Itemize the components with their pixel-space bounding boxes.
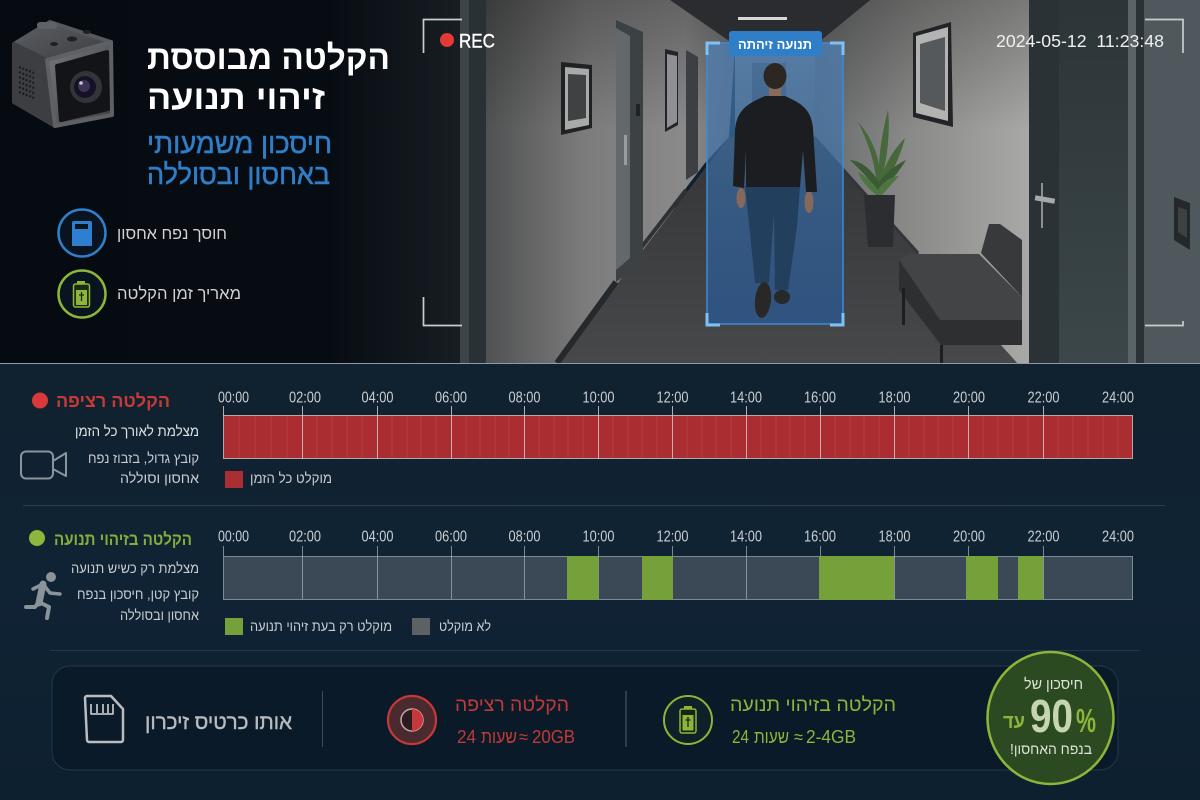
legend: not recorded <box>412 618 491 635</box>
benefit: extends recording time <box>58 270 241 318</box>
motion detected tag: תנועה זיהתה <box>738 37 812 52</box>
badge: up to 90% savings <box>988 652 1114 784</box>
icon: running person <box>26 572 60 618</box>
time axis: motion: 14:00 <box>730 528 762 546</box>
time axis: continuous: 14:00 <box>730 390 762 406</box>
section: continuous recording <box>21 390 1134 488</box>
description: continuous recording <box>75 423 199 486</box>
badge: up to 90% savings: חיסכון של <box>1024 676 1083 693</box>
time axis: continuous: 12:00 <box>656 390 689 406</box>
badge: up to 90% savings: 90 <box>1030 690 1073 742</box>
timestamp: 2024-05-12 11:23:48 <box>996 31 1164 51</box>
panel: storage comparison <box>52 666 1118 770</box>
stat: continuous recording size: ≈ <box>519 727 528 747</box>
description: continuous recording: קובץ גדול, בזבוז נפח <box>88 450 199 466</box>
time axis: continuous: 06:00 <box>435 390 467 406</box>
stat: motion recording size: 24 <box>732 727 749 747</box>
motion bounding box overlay <box>707 43 843 325</box>
stat: motion recording size <box>664 695 896 747</box>
benefit: saves storage: חוסך נפח אחסון <box>117 224 227 243</box>
viewfinder corner brackets <box>424 20 1183 326</box>
stat: motion recording size: ≈ <box>794 727 803 747</box>
time axis: motion: 16:00 <box>804 528 836 546</box>
time axis: continuous: 18:00 <box>878 390 911 406</box>
time axis: motion: 12:00 <box>656 528 689 546</box>
time axis: motion: 22:00 <box>1028 528 1060 546</box>
badge: up to 90% savings: עד <box>1003 711 1025 733</box>
stat: motion recording size: שעות <box>754 727 789 747</box>
legend: not recorded: לא מוקלט <box>439 618 491 634</box>
stat: continuous recording size: 20GB <box>532 727 575 747</box>
time axis: continuous: 08:00 <box>508 390 541 406</box>
time axis: continuous: 16:00 <box>804 390 836 406</box>
subtitle: חיסכון משמעותי <box>147 128 332 159</box>
badge: up to 90% savings: ‫בנפח האחסון!‬ <box>1010 742 1092 758</box>
time axis: motion <box>218 528 1134 546</box>
time axis: continuous <box>218 390 1134 406</box>
benefit: extends recording time: מאריך זמן הקלטה <box>117 284 241 303</box>
time axis: continuous: 10:00 <box>582 390 615 406</box>
legend: recorded on motion: מוקלט רק בעת זיהוי תנועה <box>250 618 392 634</box>
time axis: continuous: 24:00 <box>1102 390 1134 406</box>
subtitle <box>147 128 332 190</box>
time axis: continuous: 04:00 <box>362 390 394 406</box>
description: motion detection: מצלמת רק כשיש תנועה <box>71 560 199 576</box>
time axis: motion: 20:00 <box>953 528 985 546</box>
time axis: continuous: 02:00 <box>289 390 321 406</box>
stat: motion recording size: 2-4GB <box>806 727 856 747</box>
description: continuous recording: מצלמת לאורך כל הזמן <box>75 423 199 439</box>
header panel background <box>0 0 470 363</box>
heading: continuous recording: הקלטה רציפה <box>56 391 170 411</box>
title <box>147 39 390 117</box>
time axis: motion: 08:00 <box>508 528 541 546</box>
stat: continuous recording size: שעות <box>481 727 517 747</box>
time axis: motion: 18:00 <box>878 528 911 546</box>
icon: camera product <box>14 22 112 126</box>
text: same memory card: אותו כרטיס זיכרון <box>145 711 292 734</box>
stat: continuous recording size: 24 <box>457 727 476 747</box>
time axis: motion: 04:00 <box>362 528 394 546</box>
description: motion detection: אחסון ובסוללה <box>120 607 199 623</box>
title: הקלטה מבוססת <box>147 39 390 77</box>
subtitle: באחסון ובסוללה <box>147 159 330 190</box>
plant <box>850 110 906 247</box>
description: motion detection: קובץ קטן, חיסכון בנפח <box>77 586 199 602</box>
title: זיהוי תנועה <box>147 79 325 117</box>
time axis: continuous: 22:00 <box>1028 390 1060 406</box>
time axis: continuous: 00:00 <box>218 390 249 406</box>
time axis: motion: 10:00 <box>582 528 615 546</box>
motion detected tag <box>729 31 822 56</box>
lower dashboard background <box>0 363 1200 800</box>
person walking <box>733 63 817 319</box>
icon: memory card outline <box>85 696 123 742</box>
legend: recorded all the time: מוקלט כל הזמן <box>250 470 332 486</box>
badge: up to 90% savings: % <box>1076 702 1096 739</box>
time axis: continuous: 20:00 <box>953 390 985 406</box>
time axis: motion: 00:00 <box>218 528 249 546</box>
timeline bar: always recording <box>224 406 1132 459</box>
icon: video camera <box>21 452 66 478</box>
section: motion detection recording <box>26 528 1134 635</box>
description: continuous recording: אחסון וסוללה <box>120 470 199 486</box>
stat: continuous recording size <box>388 695 575 747</box>
stat: continuous recording size: הקלטה רציפה <box>455 695 569 716</box>
time axis: motion: 24:00 <box>1102 528 1134 546</box>
time axis: motion: 06:00 <box>435 528 467 546</box>
REC indicator <box>440 32 495 52</box>
time axis: motion: 02:00 <box>289 528 321 546</box>
legend: recorded all the time <box>225 470 332 488</box>
bench <box>899 224 1022 363</box>
stat: motion recording size: הקלטה בזיהוי תנועה <box>730 695 896 716</box>
benefit: saves storage <box>58 210 227 256</box>
timeline bar: motion segments <box>224 546 1132 600</box>
heading: motion detection: הקלטה בזיהוי תנועה <box>54 530 192 549</box>
REC indicator: REC <box>459 32 495 52</box>
description: motion detection <box>71 560 199 623</box>
photo: hallway scene with walking person <box>460 0 1200 363</box>
